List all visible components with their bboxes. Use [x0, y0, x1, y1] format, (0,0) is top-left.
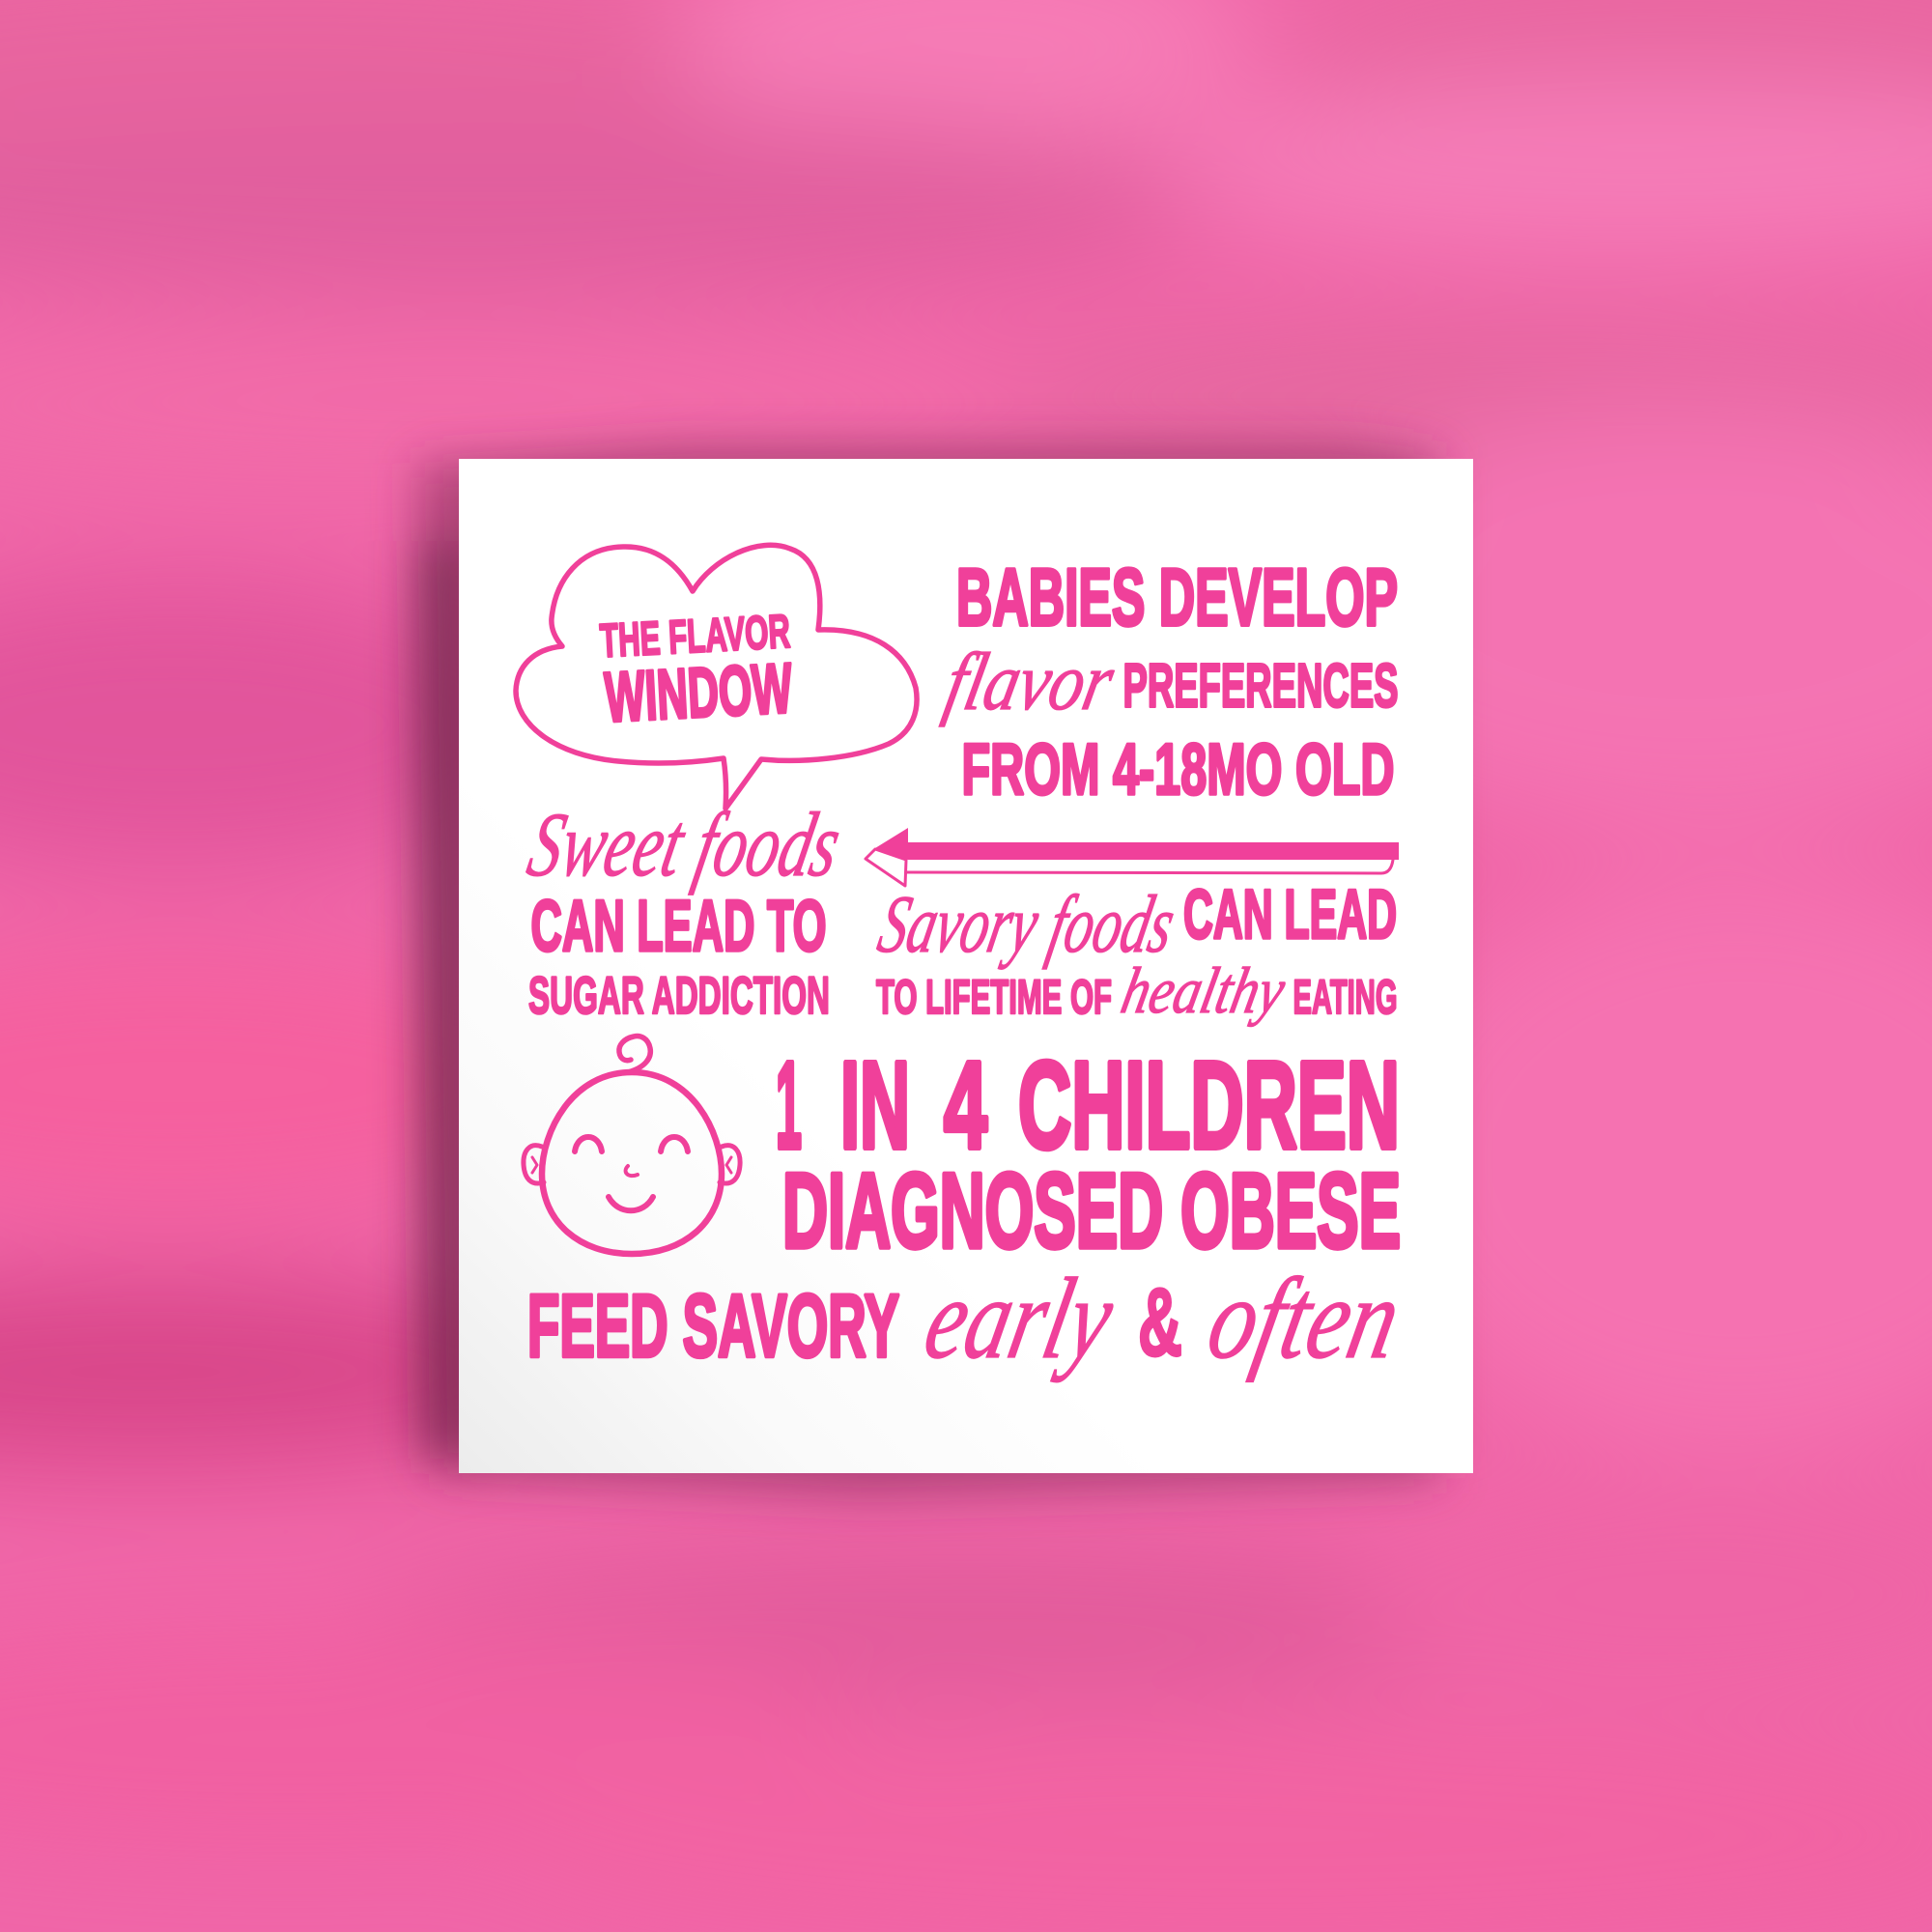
big stat: 1 in 4 children: CHILDREN	[1018, 1037, 1400, 1175]
card shadow	[417, 446, 1439, 1495]
big stat: 1 in 4 children: 1	[776, 1037, 802, 1175]
text: eating: EATING	[1293, 970, 1397, 1024]
script heading: sweet foods: Sweet foods	[521, 793, 849, 895]
text: to lifetime of: TO LIFETIME OF	[876, 970, 1112, 1024]
script word: early: early	[915, 1254, 1124, 1382]
heading: babies develop: BABIES DEVELOP	[956, 552, 1398, 642]
speech cloud: the flavor window	[516, 545, 917, 809]
text: can lead: CAN LEAD	[1183, 876, 1397, 953]
cloud heading: window: WINDOW	[603, 649, 794, 737]
script word: flavor: flavor	[938, 637, 1122, 727]
ampersand: &	[1138, 1268, 1182, 1377]
text: can lead to: CAN LEAD TO	[531, 885, 827, 966]
big stat: 1 in 4 children: IN	[840, 1037, 910, 1175]
cloud heading: the flavor: THE FLAVOR	[599, 606, 791, 668]
big stat: 1 in 4 children	[776, 1037, 1400, 1175]
script word: often: often	[1198, 1254, 1411, 1382]
text: sugar addiction: SUGAR ADDICTION	[528, 966, 830, 1025]
heading: preferences: PREFERENCES	[1122, 651, 1399, 721]
script heading: savory foods: Savory foods	[871, 879, 1182, 970]
icon: smiling baby face	[524, 1036, 740, 1254]
text: feed savory: FEED SAVORY	[527, 1277, 899, 1376]
poster card	[459, 459, 1473, 1473]
big stat: diagnosed obese: DIAGNOSED OBESE	[782, 1151, 1401, 1270]
big stat: 1 in 4 children: 4	[944, 1037, 987, 1175]
arrow pointing left	[866, 828, 1399, 886]
heading: from 4-18mo old: FROM 4-18MO OLD	[962, 728, 1395, 810]
script word: healthy: healthy	[1116, 953, 1293, 1027]
